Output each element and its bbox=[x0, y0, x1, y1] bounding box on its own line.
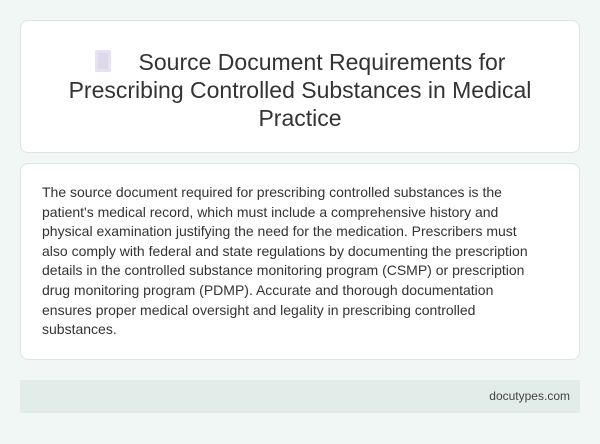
icon: scroll document bbox=[95, 50, 111, 72]
footer bbox=[20, 380, 580, 413]
footer text: docutypes.com bbox=[489, 389, 570, 403]
text block: The source document required for prescribing controlled substances is the patient's medical record, which must include a comprehensive history and physical examination justifying the need for the medication. Prescribers must also comply with federal and state regulations by documenting the prescription details in the controlled substance monitoring program (CSMP) or prescription drug monitoring program (PDMP). Accurate and thorough documentation ensures proper medical oversight and legality in prescribing controlled substances. bbox=[42, 184, 528, 337]
panel: title card bbox=[20, 20, 580, 153]
title: Source Document Requirements for Prescribing Controlled Substances in Medical Practice bbox=[69, 49, 531, 131]
panel: description bbox=[20, 163, 580, 360]
